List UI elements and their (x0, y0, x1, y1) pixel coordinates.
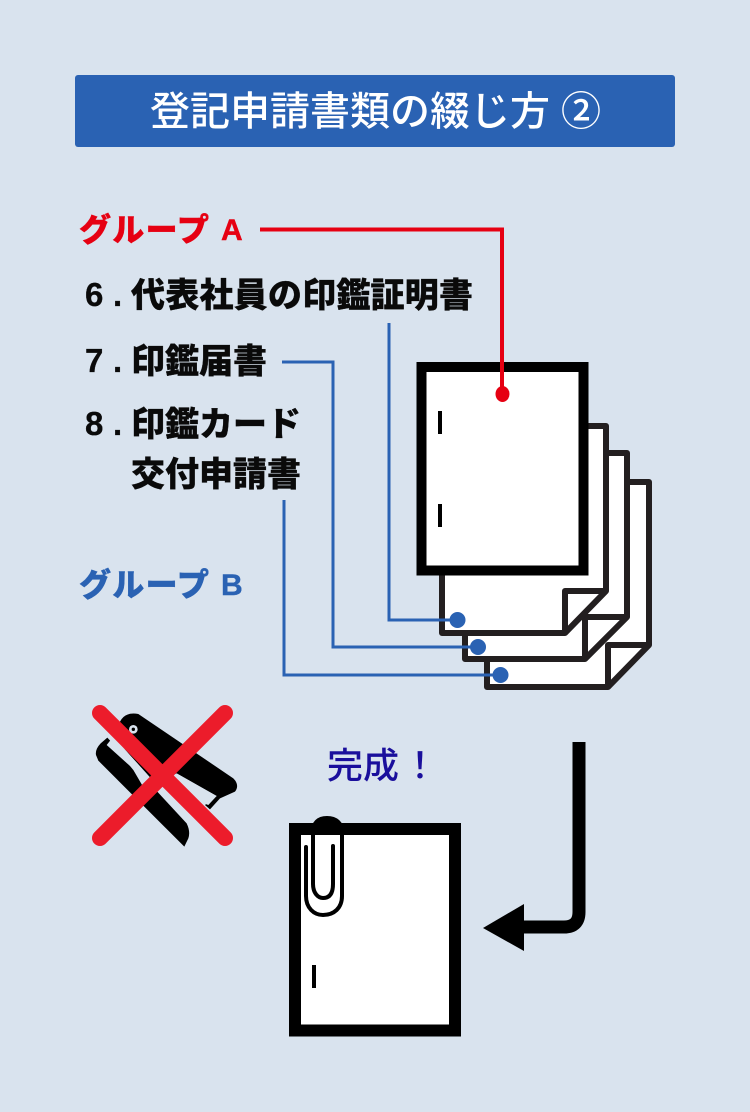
caption: complete (327, 745, 438, 786)
list item 7: 7 (85, 342, 103, 379)
sheet 1 (442, 426, 606, 633)
completed document with paperclip (295, 818, 455, 1030)
arrow to completed document (483, 742, 579, 951)
list item 6: 代表社員の印鑑証明書 (131, 277, 473, 315)
list item 8 (85, 405, 301, 494)
list item 6: 6 (85, 276, 103, 313)
caption: complete: 完成 (327, 745, 399, 786)
list item 7: . (113, 342, 122, 379)
list item 8: 交付申請書 (131, 456, 301, 494)
sheet 3 (487, 482, 649, 687)
title banner (75, 75, 675, 147)
list item 8: 印鑑カード (131, 406, 301, 444)
title banner: 登記申請書類の綴じ方 (150, 90, 550, 134)
list item 7: 印鑑届書 (131, 343, 267, 381)
list item 6: . (113, 276, 122, 313)
label: group A: グループ (79, 212, 209, 248)
icon: crossed-out stapler (96, 713, 237, 847)
title banner: ② (561, 90, 601, 134)
blue connector lines (282, 323, 500, 675)
red connector for group A (260, 230, 510, 402)
line to sheet 3 (284, 500, 500, 675)
label: group B: グループ (79, 567, 209, 603)
line to sheet 2 (282, 362, 478, 647)
stacked sheets (442, 426, 649, 687)
caption: complete: ！ (402, 745, 438, 786)
list item 8: 8 (85, 405, 103, 442)
blue connector dots (450, 612, 508, 683)
label: group B: B (221, 569, 243, 602)
sheet 2 (465, 453, 627, 659)
list item 8: . (113, 405, 122, 442)
label: group A: A (221, 214, 243, 247)
line to sheet 1 (389, 323, 457, 620)
front sheet (422, 367, 584, 570)
